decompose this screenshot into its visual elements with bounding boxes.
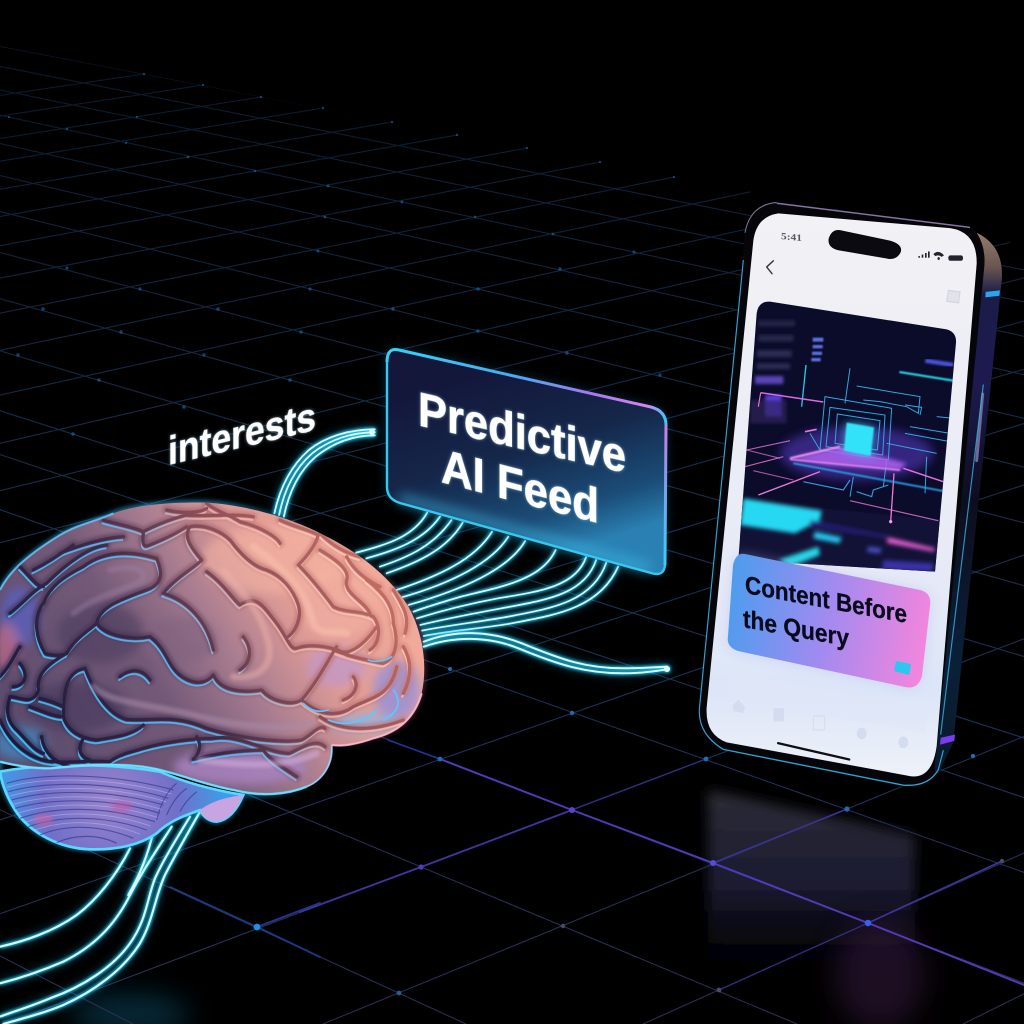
notch	[829, 230, 901, 259]
content card: Content Before the Query	[728, 554, 930, 688]
glowing wires: brain to lower left	[0, 812, 200, 1024]
card text line 2: the Query	[743, 605, 849, 653]
image blurred foreground shapes	[740, 498, 935, 572]
brain left rim	[0, 513, 113, 590]
image glowing core	[790, 446, 907, 470]
card cyan icon	[894, 661, 911, 675]
smartphone	[699, 202, 1002, 787]
phone top edge highlight	[777, 203, 970, 227]
image small blue bars	[811, 338, 823, 361]
status time: 5:41	[781, 232, 802, 244]
phone side frame	[935, 233, 1002, 774]
image circuit lines	[802, 365, 953, 497]
card: Predictive AI Feed	[387, 350, 666, 574]
brain frontal rim	[332, 693, 422, 745]
content image on screen	[738, 302, 956, 573]
black horizon mask above grid	[0, 0, 1024, 247]
phone neon outline	[699, 260, 943, 785]
brain gyri highlights	[73, 547, 347, 764]
brain	[0, 502, 424, 849]
floor reflection of phone	[708, 790, 925, 1024]
status icons	[918, 251, 963, 261]
label: interests: interests	[168, 393, 316, 474]
phone screen	[707, 213, 977, 776]
image top right neon bars	[925, 361, 953, 365]
cerebrum	[0, 502, 424, 794]
card text line 1: Content Before	[745, 571, 907, 629]
back chevron	[767, 261, 773, 274]
brain sulci rims	[0, 507, 409, 780]
bottom nav icons	[733, 700, 908, 748]
highlighted grid lines	[170, 740, 1024, 990]
card heading line 1: Predictive	[418, 383, 626, 484]
floor glow under brain wires	[70, 993, 190, 1024]
home indicator	[778, 743, 849, 759]
glowing wires: brain to interests node	[274, 429, 375, 517]
image background panels	[750, 320, 795, 423]
phone body	[699, 202, 1002, 787]
share icon	[947, 290, 960, 303]
brain frontal blue folds	[303, 657, 398, 723]
brain shading inside clip	[0, 503, 420, 785]
phone side button	[977, 394, 983, 460]
bottom nav band	[726, 672, 928, 733]
cerebellum	[0, 765, 243, 849]
brain lower rim	[0, 762, 307, 794]
card heading line 2: AI Feed	[441, 440, 599, 534]
brain sulci	[0, 503, 410, 777]
glowing wire: brain to phone	[424, 633, 670, 673]
glowing wires: brain to predictive AI feed card	[356, 513, 618, 636]
image pink lines	[745, 393, 938, 522]
brain outer glow	[0, 502, 424, 849]
brain gyri shadow halo	[0, 503, 410, 777]
